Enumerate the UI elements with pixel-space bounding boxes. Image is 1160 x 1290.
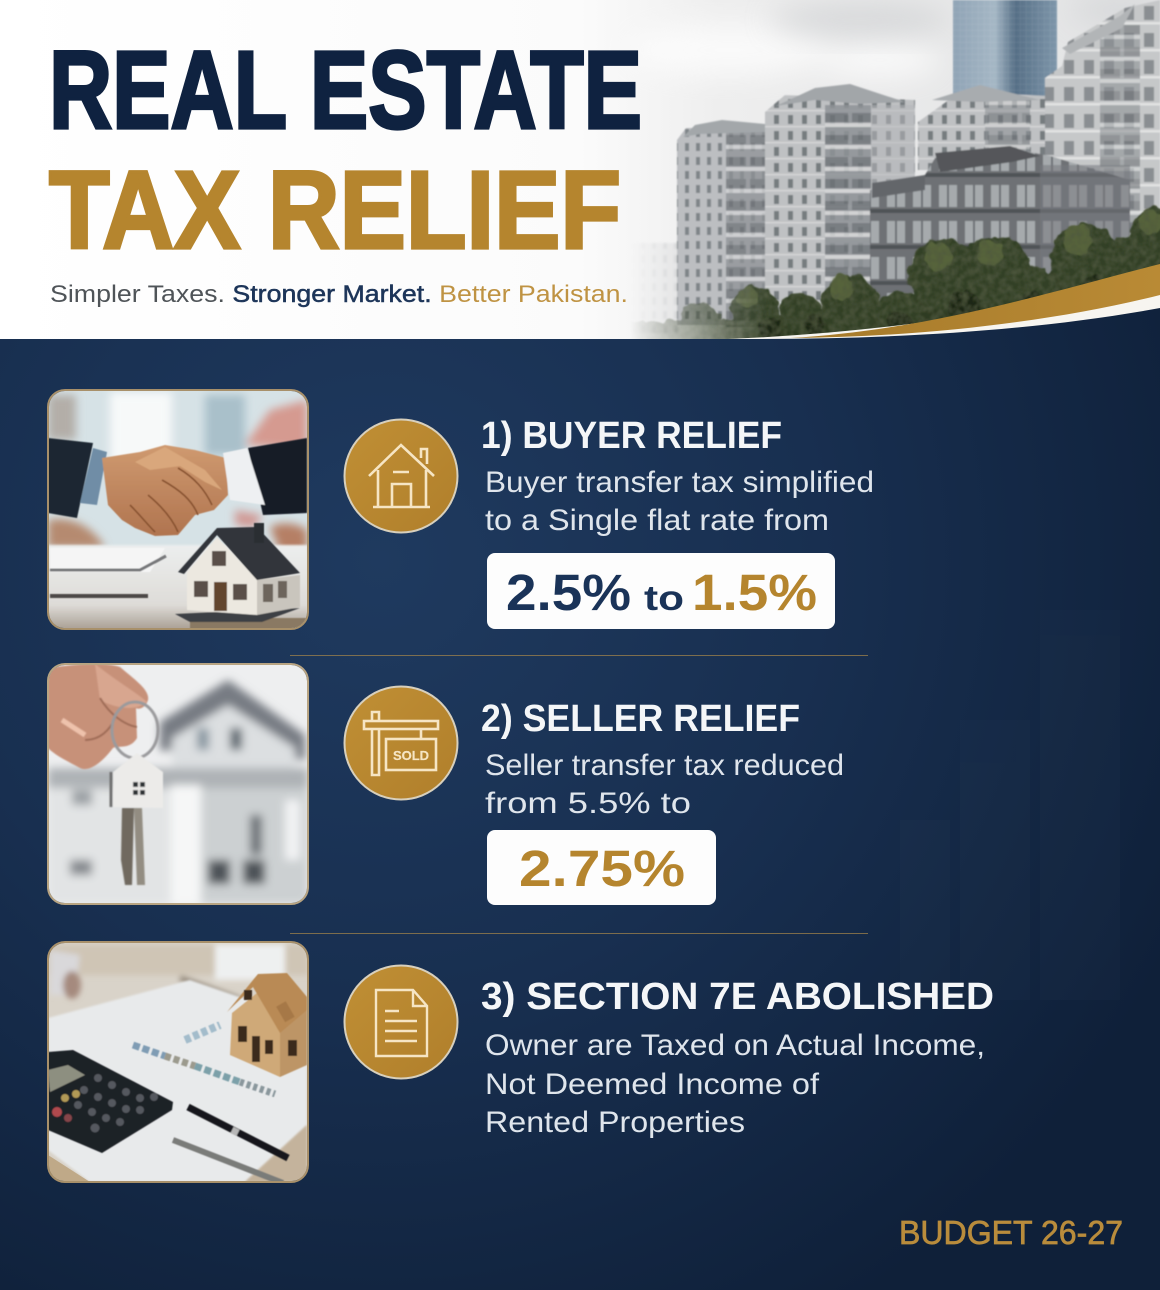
title: REAL ESTATE xyxy=(49,29,642,152)
icon: document xyxy=(344,966,458,1078)
icon: house xyxy=(344,420,458,532)
divider xyxy=(290,655,868,656)
description: seller relief xyxy=(485,749,844,820)
footer label: BUDGET 26-27 xyxy=(899,1214,1123,1251)
header background xyxy=(0,0,1160,345)
description: buyer relief: to a Single flat rate from xyxy=(485,504,829,537)
title xyxy=(49,29,642,272)
trees xyxy=(620,207,1160,345)
callout: 2.75%: 2.75% xyxy=(519,840,685,897)
description: section 7E abolished: Owner are Taxed on Actual Income, xyxy=(485,1029,985,1062)
skyline photo xyxy=(600,0,1160,345)
heading: section 7E abolished: 3) SECTION 7E ABOLISHED xyxy=(481,976,994,1018)
divider xyxy=(290,933,868,934)
description: seller relief: Seller transfer tax reduced xyxy=(485,749,844,782)
dark front block xyxy=(870,146,1130,300)
navy panel xyxy=(0,308,1160,1290)
callout: 2.75% xyxy=(487,830,716,905)
description: section 7E abolished: Not Deemed Income of xyxy=(485,1068,820,1101)
callout: 2.5% to 1.5%: to xyxy=(644,579,684,618)
description: buyer relief xyxy=(485,466,874,537)
panel: seller relief xyxy=(48,664,844,905)
callout: 2.5% to 1.5%: 2.5% xyxy=(506,564,631,621)
heading: buyer relief: 1) BUYER RELIEF xyxy=(481,415,782,457)
icon: sold sign xyxy=(344,686,458,800)
photo: calculator and model house xyxy=(48,942,308,1183)
apartment tower two xyxy=(765,84,915,320)
description: section 7E abolished: Rented Properties xyxy=(485,1106,745,1139)
panel: section 7E abolished xyxy=(48,942,994,1183)
icon: sold sign: SOLD xyxy=(393,748,429,763)
heading: seller relief: 2) SELLER RELIEF xyxy=(481,698,800,740)
description: buyer relief: Buyer transfer tax simplified xyxy=(485,466,874,499)
gold swoosh xyxy=(640,264,1160,345)
glass tower xyxy=(953,0,1057,108)
panel: buyer relief xyxy=(48,390,874,632)
apartment tower one xyxy=(677,120,765,327)
description: seller relief: from 5.5% to xyxy=(485,787,691,820)
chart marks xyxy=(133,1025,275,1094)
description: section 7E abolished xyxy=(485,1029,985,1139)
faint building backdrop xyxy=(900,610,1120,1000)
photo: keys and blurred house xyxy=(48,664,308,904)
title: TAX RELIEF xyxy=(49,149,621,272)
photo: handshake and model house xyxy=(48,390,308,632)
tagline: Simpler Taxes. Stronger Market. Better Pakistan. xyxy=(50,281,628,308)
callout: 2.5% to 1.5%: 1.5% xyxy=(692,564,817,621)
apartment tower three xyxy=(918,85,1050,170)
callout: 2.5% to 1.5% xyxy=(487,553,835,629)
apartment tower right xyxy=(1044,0,1160,235)
distant building xyxy=(652,242,678,333)
